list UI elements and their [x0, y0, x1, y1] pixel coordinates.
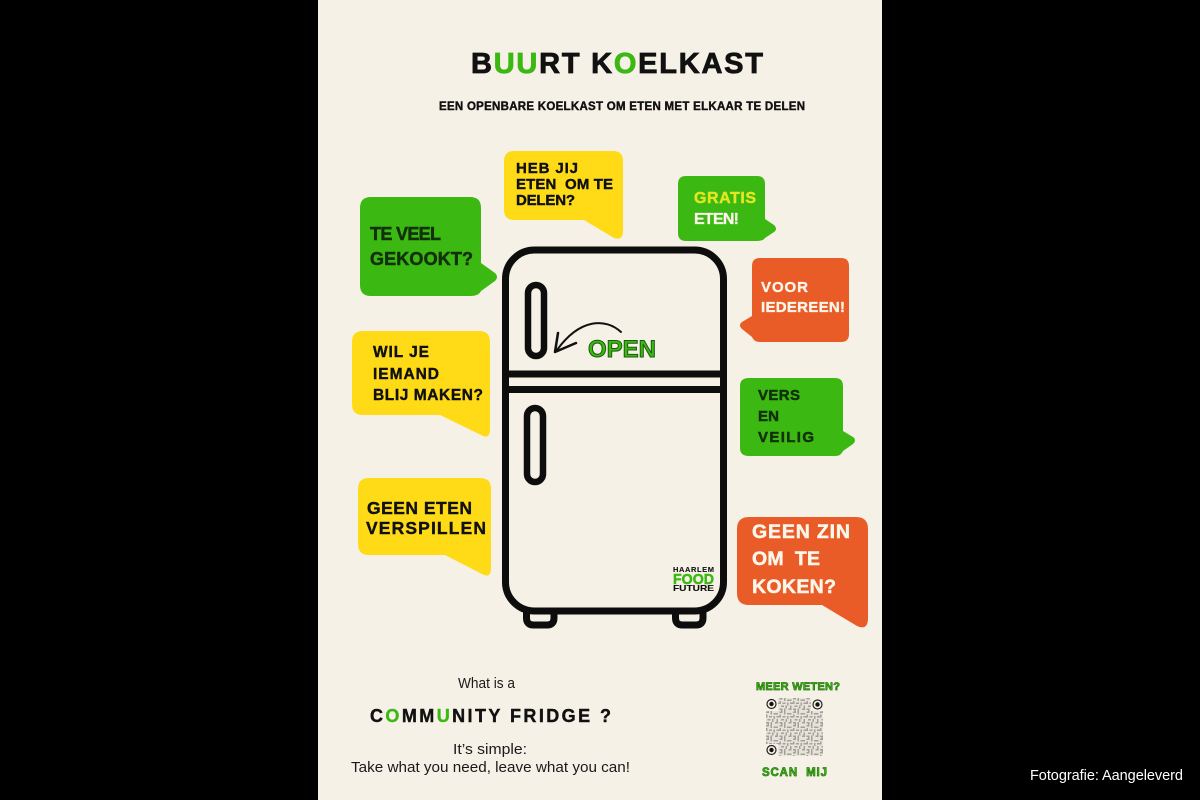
haarlem food future logo: FOOD	[673, 571, 714, 588]
speech bubble: geen zin om te koken	[737, 517, 868, 627]
speech bubble: vers en veilig: EN	[758, 408, 779, 425]
title: BUURT KOELKAST	[471, 48, 763, 80]
speech bubble: wil je iemand blij maken: WIL JE	[373, 344, 429, 361]
speech bubble: vers en veilig: VEILIG	[758, 429, 814, 446]
photo credit: Fotografie: Aangeleverd	[1030, 768, 1183, 784]
haarlem food future logo: HAARLEM	[673, 565, 714, 574]
speech bubble: wil je iemand blij maken: BLIJ MAKEN?	[373, 387, 483, 404]
lower door handle	[527, 408, 543, 482]
speech bubble: wil je iemand blij maken: IEMAND	[373, 366, 439, 383]
fridge illustration	[506, 250, 724, 625]
fridge left foot	[526, 612, 554, 625]
community fridge heading: COMMUNITY FRIDGE ?	[370, 706, 611, 726]
speech bubble: te veel gekookt: TE VEEL	[370, 224, 441, 244]
speech bubble: vers en veilig	[740, 378, 855, 456]
speech bubble: te veel gekookt: GEKOOKT?	[370, 249, 473, 269]
open label: OPEN	[588, 336, 656, 363]
speech bubble: te veel gekookt	[360, 197, 497, 296]
speech bubble: geen eten verspillen: GEEN ETEN	[367, 498, 472, 518]
scan mij label: SCAN MIJ	[762, 767, 827, 779]
speech bubble: gratis eten: GRATIS	[694, 190, 756, 207]
poster background	[318, 0, 882, 800]
fridge body	[506, 250, 724, 611]
speech bubble: gratis eten: ETEN!	[694, 211, 739, 228]
speech bubble: geen zin om te koken: GEEN ZIN	[752, 521, 850, 543]
speech bubble: voor iedereen: IEDEREEN!	[761, 299, 845, 316]
speech bubble: gratis eten	[678, 176, 776, 241]
speech bubble: voor iedereen	[740, 258, 849, 342]
meer weten label: MEER WETEN?	[756, 681, 840, 693]
speech bubble: heb jij eten om te delen	[504, 151, 623, 239]
haarlem food future logo: FUTURE	[673, 583, 714, 593]
qr code	[765, 698, 824, 757]
speech bubble: geen zin om te koken: OM TE	[752, 548, 820, 570]
fridge door divider	[506, 374, 723, 390]
speech bubble: geen eten verspillen	[358, 478, 491, 576]
subtitle: EEN OPENBARE KOELKAST OM ETEN MET ELKAAR TE DELEN	[439, 101, 805, 113]
haarlem food future logo	[673, 565, 714, 593]
speech bubble: heb jij eten om te delen: ETEN OM TE	[516, 176, 613, 193]
take what you need: Take what you need, leave what you can!	[351, 759, 630, 776]
speech bubble: heb jij eten om te delen: HEB JIJ	[516, 160, 578, 177]
what is a: What is a	[458, 675, 516, 692]
speech bubble: wil je iemand blij maken	[352, 331, 490, 437]
fridge right foot	[676, 612, 703, 625]
speech bubble: geen zin om te koken: KOKEN?	[752, 576, 836, 598]
speech bubble: voor iedereen: VOOR	[761, 279, 808, 296]
speech bubble: geen eten verspillen: VERSPILLEN	[366, 518, 486, 538]
arrow to handle	[555, 323, 621, 352]
upper door handle	[528, 285, 544, 356]
speech bubble: heb jij eten om te delen: DELEN?	[516, 192, 575, 209]
speech bubble: vers en veilig: VERS	[758, 387, 800, 404]
it's simple: It’s simple:	[453, 741, 527, 758]
